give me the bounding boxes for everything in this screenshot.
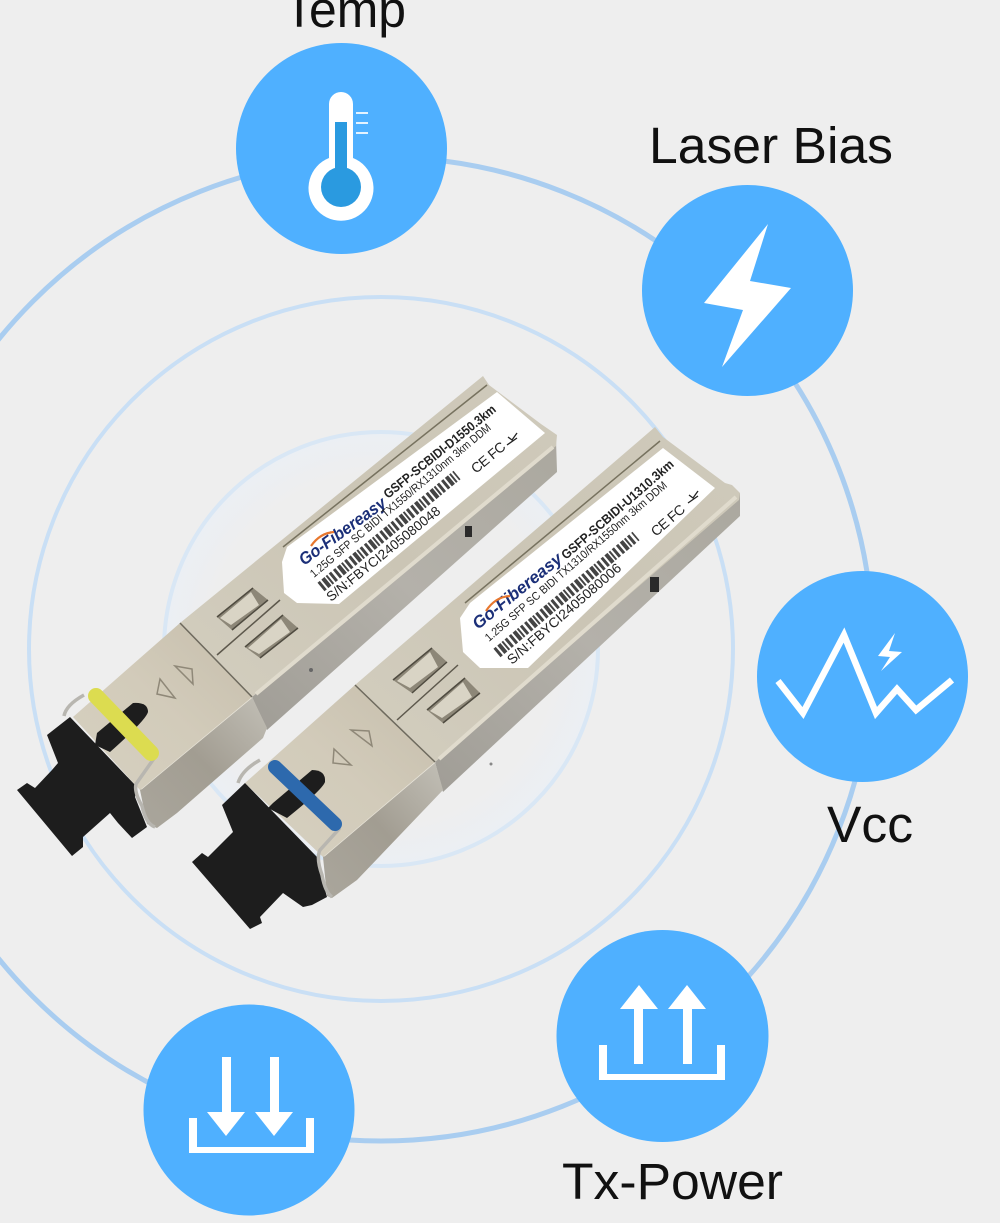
slot — [268, 770, 325, 818]
label — [460, 448, 715, 668]
cage top — [73, 623, 252, 790]
square port — [650, 577, 659, 592]
laser bias heading: Laser Bias — [649, 117, 893, 174]
serial number: S/N:FBYCI2405080048 — [323, 503, 443, 604]
icon: thermometer — [236, 43, 447, 254]
small hole — [309, 668, 313, 672]
cage top — [245, 685, 435, 857]
rear body side — [252, 440, 557, 730]
SFP module: yellow D1550 — [17, 376, 557, 856]
black connector hood — [17, 717, 147, 856]
rear body top — [355, 427, 740, 762]
tx-power heading: Tx-Power — [562, 1153, 783, 1210]
icon: voltage waveform — [757, 571, 968, 782]
cage side — [323, 762, 443, 898]
icon: lightning bolt — [642, 185, 853, 396]
latch tab A — [217, 588, 268, 630]
latch tab B — [245, 615, 298, 658]
yellow tag — [96, 696, 151, 753]
SFP module: blue U1310 — [192, 427, 740, 929]
concentric signal rings — [0, 157, 873, 1141]
certification marks: CE FC — [468, 438, 509, 476]
barcode — [321, 475, 457, 587]
brand: Go-Fibereasy — [469, 548, 567, 633]
direction triangles — [157, 666, 193, 698]
label — [282, 392, 545, 604]
brand: Go-Fibereasy — [295, 492, 391, 569]
barcode — [497, 536, 636, 653]
wire clip — [64, 695, 155, 827]
panel seam — [397, 665, 458, 720]
latch tab A — [393, 648, 447, 693]
slot — [95, 703, 148, 752]
spec line: 1.25G SFP SC BIDI TX1310/RX1550nm 3km DDM — [483, 480, 670, 644]
vcc heading: Vcc — [827, 796, 913, 853]
rear body top — [180, 376, 557, 697]
black connector hood — [192, 783, 327, 929]
serial number: S/N:FBYCI2405080006 — [504, 560, 624, 667]
certification marks: CE FC — [647, 501, 688, 539]
square port — [465, 526, 472, 537]
rear body side — [435, 493, 740, 792]
icon: download tray — [144, 1004, 354, 1216]
wire clip — [238, 760, 340, 897]
blue tag — [275, 767, 335, 824]
model number: GSFP-SCBIDI-D1550.3km — [380, 402, 499, 501]
latch tab B — [427, 678, 480, 723]
spec line: 1.25G SFP SC BIDI TX1550/RX1310nm 3km DDM — [308, 422, 494, 580]
icon: upload tray — [556, 930, 768, 1142]
cage side — [140, 697, 267, 828]
model number: GSFP-SCBIDI-U1310.3km — [558, 456, 677, 562]
small hole — [490, 762, 492, 766]
panel seam — [217, 600, 280, 655]
direction triangles — [333, 730, 372, 765]
